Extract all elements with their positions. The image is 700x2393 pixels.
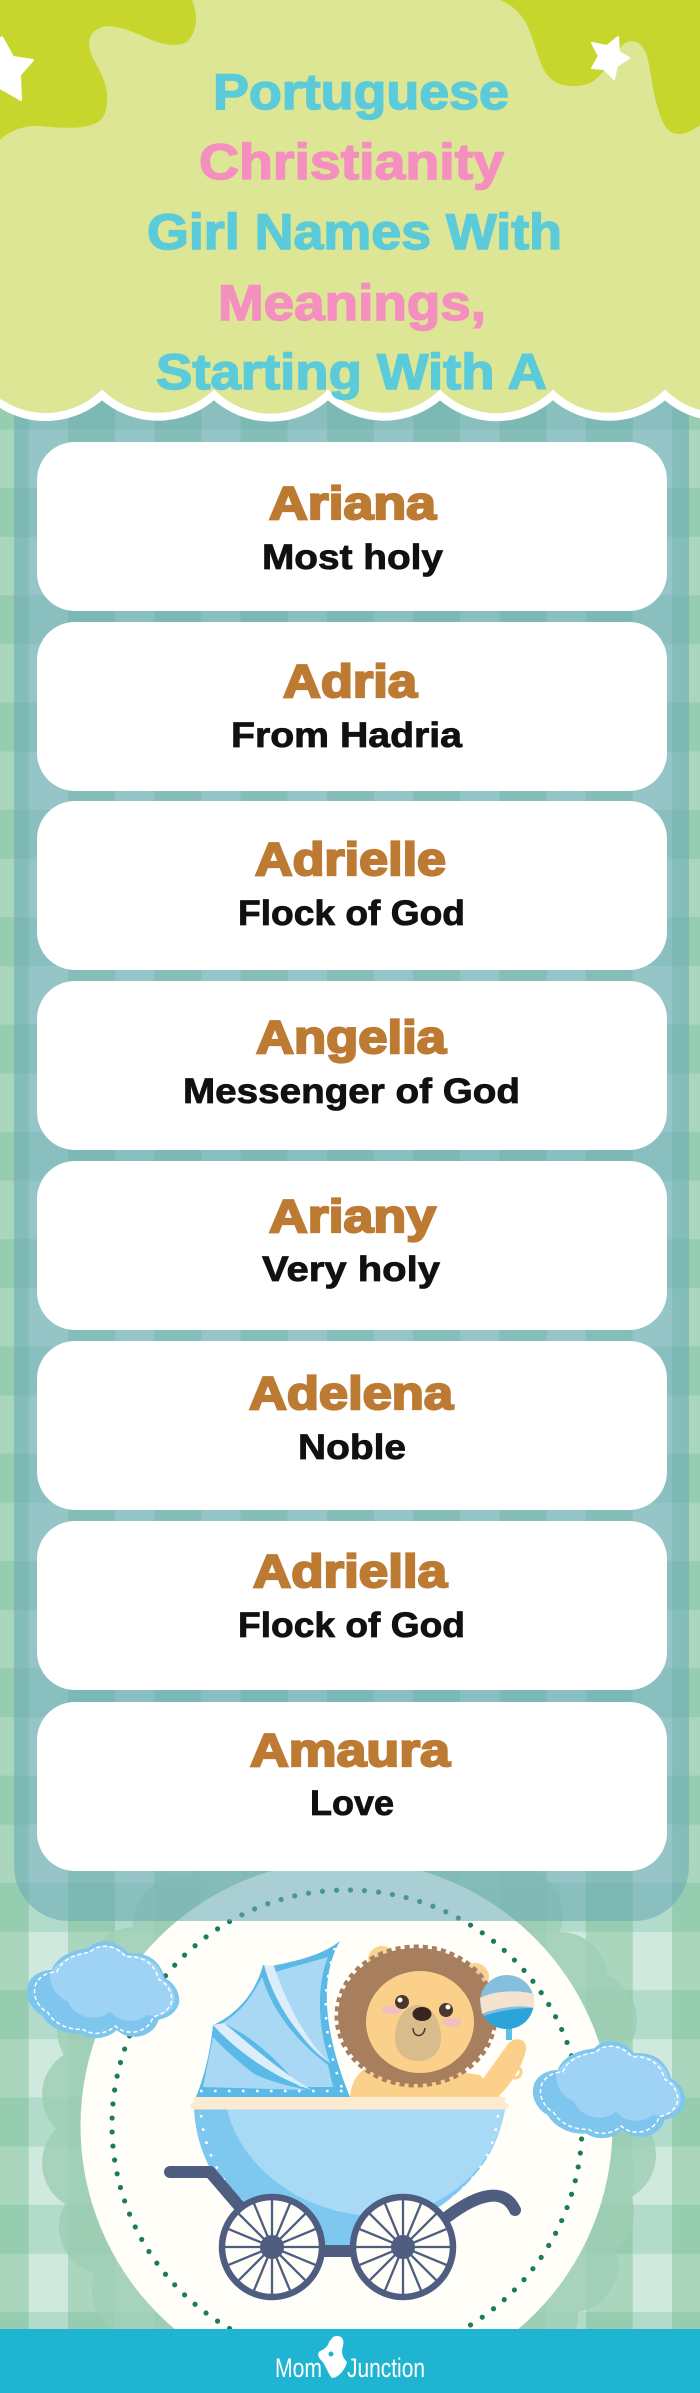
title: Girl Names With: [147, 204, 562, 260]
card: Angelia: Angelia: [256, 1011, 446, 1063]
card: Adriella: Adriella: [253, 1545, 447, 1597]
icon: left star: [0, 37, 33, 100]
scalloped white edge: [0, 395, 700, 418]
icon: left cloud: [27, 1941, 179, 2038]
scalloped backdrop behind circle: [42, 1837, 656, 2388]
logo wordmark: [275, 2353, 425, 2383]
translucent teal panel: [14, 380, 689, 1921]
title: Starting With A: [156, 344, 547, 400]
illustration: lion in baby carriage: [170, 1941, 534, 2297]
card: Adelena: Adelena: [249, 1367, 453, 1419]
card: Adrielle: [37, 801, 667, 970]
card: Adelena: [37, 1341, 667, 1510]
card: Angelia: Messenger of God: [183, 1072, 520, 1111]
icon: lion: [338, 1946, 526, 2097]
card: Adrielle: Flock of God: [238, 894, 465, 933]
card: Adria: From Hadria: [231, 716, 463, 755]
card: Adria: [37, 622, 667, 791]
card: Ariana: Ariana: [269, 477, 436, 529]
card: Ariana: Most holy: [262, 538, 444, 577]
logo wordmark: Mom: [275, 2353, 322, 2383]
footer bar: [0, 2329, 700, 2393]
icon: carriage handles: [170, 2172, 515, 2251]
card: Adriella: [37, 1521, 667, 1690]
card: Adrielle: Adrielle: [255, 833, 446, 885]
card: Ariany: Very holy: [262, 1250, 441, 1289]
lime blob: top left: [0, 0, 196, 140]
lime blob: top right: [500, 0, 700, 134]
card: Amaura: Love: [310, 1784, 394, 1823]
card: Amaura: [37, 1702, 667, 1871]
icon: right wheel: [353, 2197, 453, 2297]
logo wordmark: Junction: [347, 2353, 425, 2383]
card: Ariana: [37, 442, 667, 611]
card: Adria: Adria: [283, 655, 417, 707]
icon: carriage canopy: [196, 1941, 350, 2097]
icon: right star: [592, 37, 629, 79]
icon: carriage basket: [194, 2097, 505, 2250]
card: Adelena: Noble: [298, 1428, 406, 1467]
icon: rattle: [480, 1975, 534, 2040]
card: Angelia: [37, 981, 667, 1150]
cream circle: [80, 1860, 612, 2392]
card: Ariany: [37, 1161, 667, 1330]
card: Adriella: Flock of God: [238, 1606, 465, 1645]
card: Ariany: Ariany: [269, 1190, 436, 1242]
title: Meanings,: [218, 275, 486, 331]
icon: right cloud: [533, 2041, 685, 2138]
card: Amaura: Amaura: [250, 1724, 450, 1776]
title: Portuguese: [213, 64, 509, 120]
header banner: [0, 0, 700, 418]
title: Christianity: [199, 134, 504, 190]
icon: MomJunction logo mark: [318, 2336, 347, 2378]
title: [147, 64, 562, 400]
dotted circle ring: [112, 1890, 582, 2360]
icon: left wheel: [222, 2197, 322, 2297]
